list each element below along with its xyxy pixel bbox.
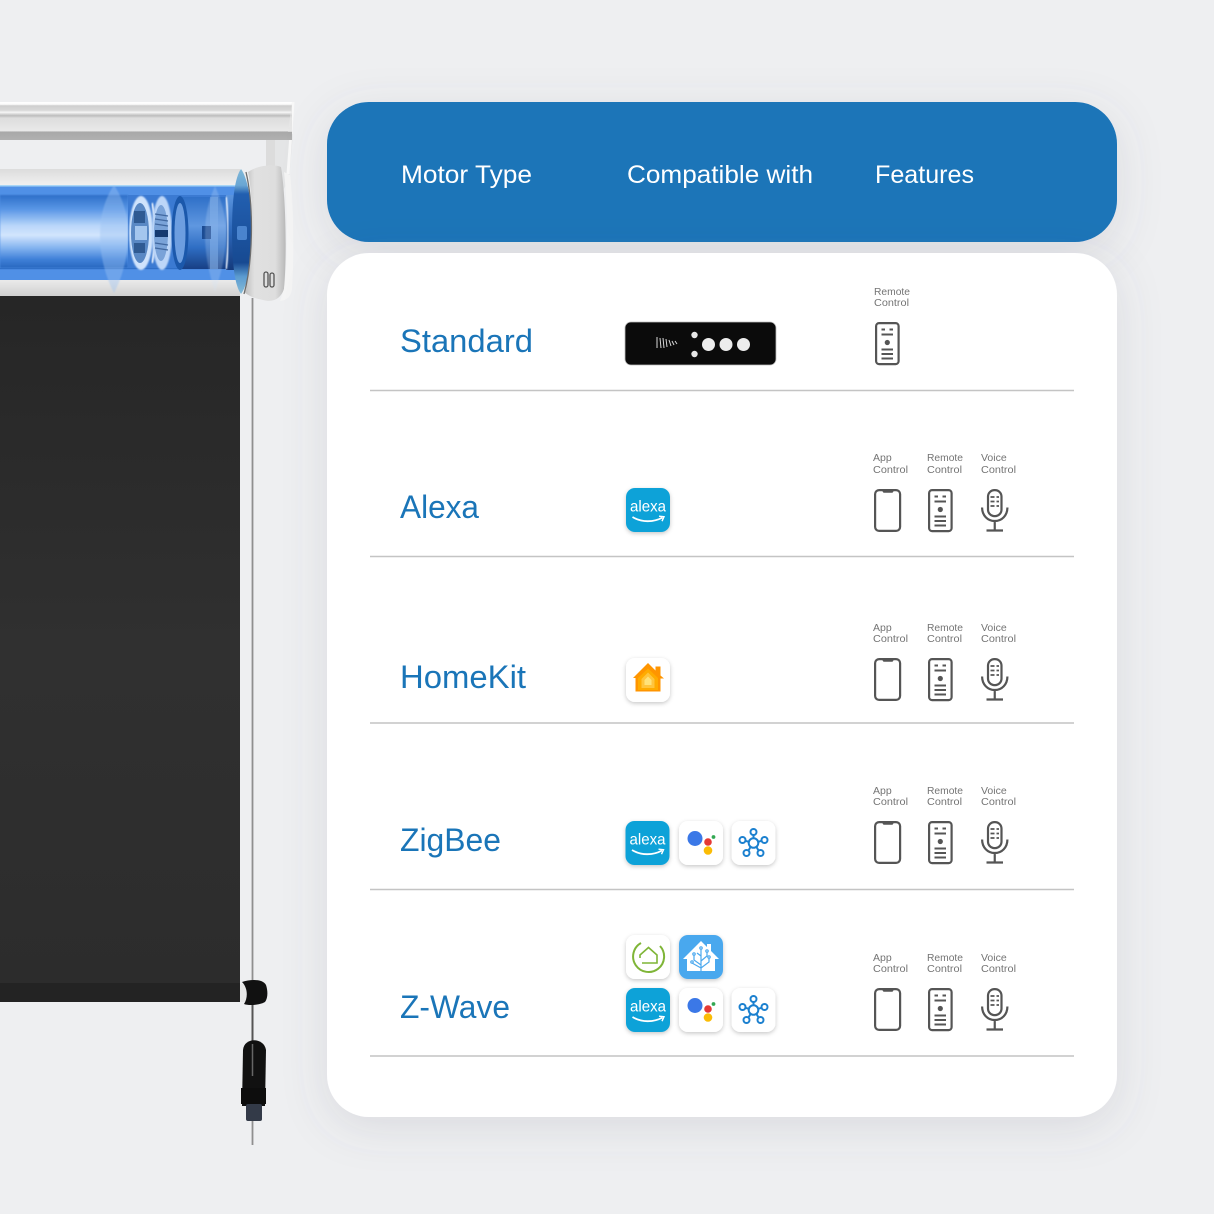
row: Standard [400,286,910,365]
gear one [129,196,153,270]
feature: remote control: Remote [874,286,910,298]
icon: home assistant [679,935,723,979]
features: Control [927,796,962,808]
heading: compatible with: Compatible with [627,161,813,189]
heading: features: Features [875,161,974,189]
motor internals [100,169,252,294]
features [873,452,1016,531]
top rail and bracket [0,102,294,192]
header panel [327,102,1117,242]
features: Control [873,796,908,808]
bottom bar clip [240,980,267,1005]
feature: remote control [874,286,910,364]
feature: remote control: Control [874,297,909,309]
ghost ring left [100,185,128,293]
features: Control [981,633,1016,645]
features: App [873,785,892,797]
blind fabric [0,296,240,1002]
features: Remote [927,785,963,797]
features [873,622,1016,700]
features: Control [927,963,962,975]
features: Control [981,963,1016,975]
end cap [244,165,293,301]
cord weight [241,1040,266,1121]
icon: apple home [626,658,670,702]
motor name: ZigBee [400,822,501,858]
motor head [180,197,226,269]
features [873,785,1016,863]
icon: alexa [626,488,670,532]
icon: smart home ring [626,935,670,979]
row: HomeKit [400,622,1016,702]
features: Control [981,796,1016,808]
features: Voice [981,622,1007,634]
features: App [873,622,892,634]
panel: motor table [327,253,1117,1117]
features: Remote [927,452,963,464]
heading: motor type: Motor Type [401,161,532,189]
tube end opening [232,169,252,294]
features: Control [981,464,1016,476]
features: Voice [981,452,1007,464]
roller tube [0,169,240,296]
row: ZigBee [400,785,1016,865]
motor name: HomeKit [400,659,526,695]
icons: compatible platforms [626,935,776,1032]
features: Control [873,633,908,645]
gear two [152,196,172,270]
features: Control [873,464,908,476]
features: Control [927,464,962,476]
features: App [873,952,892,964]
remote control image [625,322,776,365]
pull cord [252,298,254,1145]
features: Voice [981,785,1007,797]
features: Control [873,963,908,975]
row: Alexa [400,452,1016,532]
motor name: Alexa [400,489,479,525]
features [873,952,1016,1030]
row: Z-Wave [400,935,1016,1032]
roller blind illustration [0,102,294,1145]
features: App [873,452,892,464]
features: Remote [927,952,963,964]
features: Remote [927,622,963,634]
motor name: Z-Wave [400,989,510,1025]
ghost ring right [205,186,226,292]
features: Control [927,633,962,645]
motor name: Standard [400,323,533,359]
icons: compatible platforms [626,821,776,865]
features: Voice [981,952,1007,964]
